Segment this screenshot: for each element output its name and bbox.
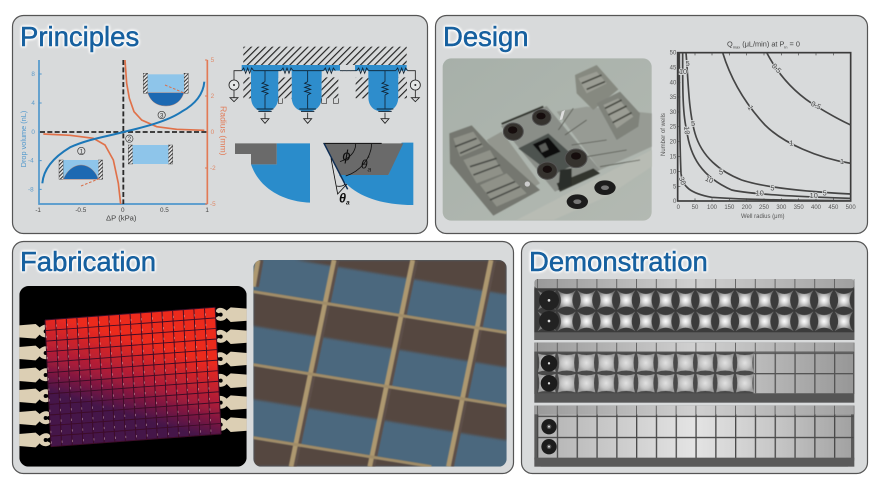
axis numbers: -8 — [28, 186, 34, 193]
contour labels: 0.5 — [810, 99, 823, 112]
axis numbers: 0 — [211, 129, 215, 136]
x axis label: pressure: ΔP (kPa) — [106, 213, 137, 222]
tick labels: 150 — [724, 205, 735, 211]
gaskets — [567, 180, 616, 209]
state markers: 2 — [128, 136, 132, 143]
chart title: = 0 — [787, 40, 800, 49]
inset: state 2 flat meniscus — [128, 145, 173, 164]
axis numbers: 5 — [211, 57, 215, 64]
contour labels: 0.5 — [770, 61, 783, 75]
diagram: contact angle geometry: θ — [339, 192, 346, 206]
y axis label: radius: Radius (mm) — [219, 106, 229, 156]
contour labels: 10 — [756, 189, 764, 198]
chart: contour of Qmax by well radius and number of wells: 50 — [670, 51, 677, 57]
chart: contour of Qmax by well radius and number of wells: 5 — [673, 184, 677, 190]
contour labels: 10 — [682, 126, 692, 135]
axis numbers: 4 — [31, 100, 35, 107]
axis numbers — [28, 57, 216, 214]
axis numbers: -0.5 — [75, 207, 87, 214]
contour labels: 5 — [770, 184, 774, 193]
electrode pads left — [19, 324, 50, 447]
contour labels: 1 — [840, 157, 844, 166]
axis numbers: 2 — [211, 93, 215, 100]
diagram: electrical circuit of wells — [229, 47, 420, 123]
state markers: 1 — [80, 148, 84, 155]
state markers — [78, 111, 165, 155]
contour labels — [677, 59, 844, 200]
panel: demonstration — [522, 242, 868, 474]
well grid — [45, 307, 221, 447]
panel: design — [436, 16, 868, 234]
chart title: in — [784, 45, 787, 50]
axis numbers: 0 — [121, 207, 125, 214]
tick labels: 50 — [692, 205, 699, 211]
chart: contour of Qmax by well radius and number of wells: 10 — [670, 169, 677, 175]
tick labels: 350 — [794, 205, 804, 211]
heading: demonstration: Demonstration — [529, 246, 708, 277]
chart title: max — [733, 45, 740, 50]
diagram: electrical circuit of wells: · · · — [342, 67, 352, 74]
chart: contour of Qmax by well radius and number of wells: 0 — [673, 199, 677, 205]
axis numbers: 1 — [205, 207, 209, 214]
image: 3D chip assembly render — [443, 58, 652, 221]
diagram: contact angle geometry: a — [346, 200, 350, 207]
inset: state 3 inverted drop — [143, 73, 188, 106]
chart title: Q — [727, 40, 733, 49]
heading: principles: Principles — [20, 21, 139, 52]
tick labels: 100 — [707, 205, 718, 211]
axis numbers: -2 — [210, 165, 216, 172]
diagram: contact angle geometry: a — [368, 167, 372, 174]
electrode pads right — [216, 307, 247, 432]
contour labels: 5 — [686, 59, 690, 68]
tick labels: 0 — [677, 205, 681, 211]
diagram: contact angle geometry — [323, 143, 413, 207]
chart: contour of Qmax by well radius and number of wells: 20 — [670, 140, 677, 146]
axis numbers: -5 — [210, 201, 216, 208]
contour labels: 10 — [679, 67, 687, 76]
tick labels: 300 — [776, 205, 787, 211]
contour labels: 1 — [746, 104, 755, 112]
axis numbers: 0 — [31, 129, 35, 136]
tick labels: 400 — [811, 205, 822, 211]
y axis label: Number of wells — [661, 113, 667, 156]
chart: contour of Qmax by well radius and number of wells: 40 — [670, 80, 677, 86]
x axis label: Well radius (μm) — [741, 214, 785, 220]
chart: drop volume and radius versus pressure — [19, 57, 229, 222]
heading: design: Design — [443, 21, 529, 52]
heading: fabrication: Fabrication — [20, 246, 156, 277]
contour labels: 10 — [810, 191, 818, 200]
tick labels: 200 — [742, 205, 752, 211]
diagram: contact angle geometry: ' — [368, 156, 370, 163]
chart: contour of Qmax by well radius and number of wells: 15 — [670, 155, 677, 161]
diagram: contact angle geometry: θ — [361, 157, 368, 171]
contour labels: 5 — [719, 168, 723, 177]
chart: contour of Qmax by well radius and number of wells: 25 — [670, 125, 677, 131]
tick labels: 250 — [759, 205, 770, 211]
chart: contour of Qmax by well radius and number of wells — [661, 40, 856, 220]
axis numbers: -1 — [35, 207, 41, 214]
state markers: 3 — [160, 112, 164, 119]
photo: micrograph of wells — [253, 260, 507, 467]
contour labels: 5 — [823, 188, 827, 197]
inset: state 1 drop — [59, 160, 103, 186]
chart: contour of Qmax by well radius and number of wells: 30 — [670, 110, 677, 116]
tick labels: 500 — [846, 205, 856, 211]
contour labels: 1 — [789, 139, 793, 148]
tick labels — [677, 205, 856, 211]
axis numbers: -4 — [28, 158, 34, 165]
axis numbers: 0.5 — [160, 207, 169, 214]
diagram: contact angle geometry: ϕ — [342, 149, 350, 165]
photo: chip with red to purple well array — [19, 286, 247, 467]
chart title: (μL/min) at P — [740, 40, 784, 49]
chart: contour of Qmax by well radius and number of wells: 45 — [670, 65, 677, 71]
strip: second frame with shrinking drops — [534, 343, 854, 403]
y axis label: drop volume: Drop volume (nL) — [19, 111, 28, 167]
diagram: contact line pinned at corner — [235, 143, 310, 203]
wells — [503, 109, 587, 179]
panel: principles — [12, 16, 428, 234]
axis numbers: 8 — [31, 71, 35, 78]
contour labels: 5 — [691, 119, 695, 128]
contour labels: 30 — [677, 175, 688, 186]
strip: first frame with drops — [534, 279, 854, 340]
strip: third frame with flat wells — [534, 406, 854, 467]
chart: contour of Qmax by well radius and number of wells: 35 — [670, 95, 677, 101]
panel: fabrication — [12, 242, 514, 474]
contour labels: 10 — [704, 174, 715, 185]
tick labels: 450 — [828, 205, 839, 211]
